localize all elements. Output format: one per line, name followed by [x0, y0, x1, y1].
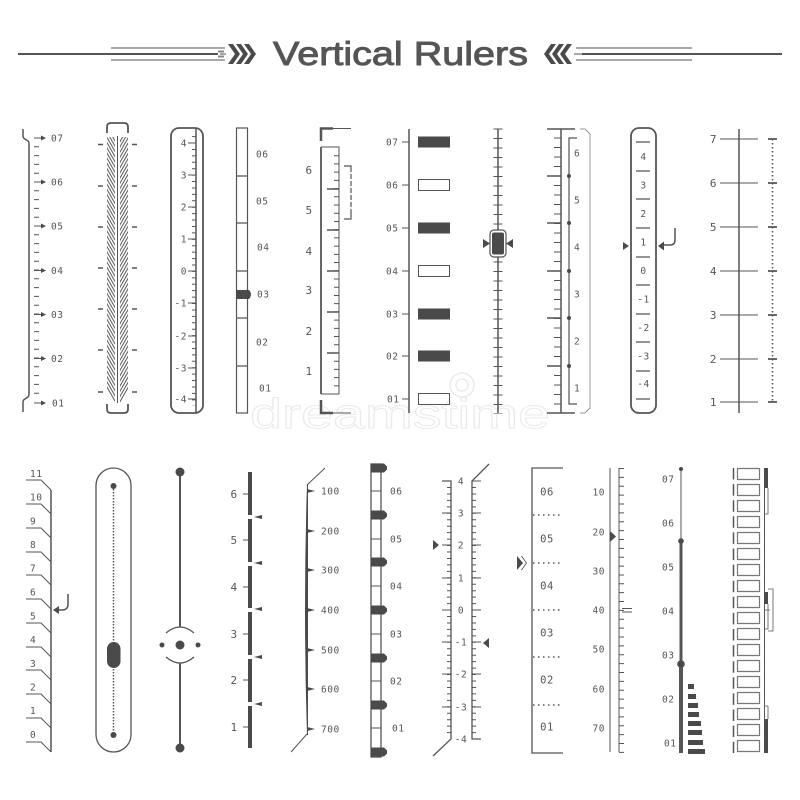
ruler 3: rounded frame scale: -1 [175, 298, 187, 309]
ruler 17: twin scales: -2 [455, 669, 467, 680]
ruler 17: twin scales: 3 [458, 508, 464, 519]
ruler 9: capsule scale with arrow: -1 [637, 294, 650, 306]
ruler 3: rounded frame scale: -2 [175, 331, 187, 342]
ruler 2: hatched chevron band [98, 123, 137, 413]
ruler 19: numbered double line: 70 [593, 723, 605, 734]
ruler 17: twin scales: 4 [458, 476, 464, 487]
ruler 1: bracket with arrows: 06 [51, 178, 63, 188]
ruler 16: column with tabs: 04 [390, 581, 402, 592]
ruler 18: bracket panel with dotted rows: 02 [540, 674, 554, 686]
ruler 5: box scale with corner brackets: 1 [305, 365, 313, 378]
ruler 1: bracket with arrows: 01 [52, 398, 64, 410]
ruler 8: double scale with dots [547, 129, 590, 413]
ruler 14: segmented bar scale: 5 [230, 534, 238, 547]
ruler 13: line slider with target [160, 468, 200, 752]
ruler 11: tabbed scale with arrow: 2 [30, 682, 36, 694]
ruler 11: tabbed scale with arrow: 3 [30, 659, 36, 670]
ruler 20: progress line with bars: 04 [662, 606, 674, 617]
ruler 21: stacked cells with side bars [734, 468, 773, 753]
ruler 8: double scale with dots: 3 [574, 290, 580, 300]
ruler 17: twin scales: 2 [458, 540, 464, 551]
ruler 6: line with blocks: 06 [386, 180, 398, 191]
ruler 8: double scale with dots: 1 [574, 384, 580, 394]
ruler 6: line with blocks: 07 [386, 137, 398, 148]
ruler 10: crossbar scale with dotted track: 4 [710, 265, 717, 278]
ruler 15: bowed line scale: 200 [321, 526, 340, 538]
ruler 1: bracket with arrows: 07 [51, 134, 63, 144]
ruler 11: tabbed scale with arrow: 10 [30, 492, 42, 504]
ruler 15: bowed line scale: 100 [321, 486, 340, 498]
ruler 17: twin scales: -1 [455, 637, 467, 648]
ruler 9: capsule scale with arrow: -3 [637, 352, 650, 362]
ruler 19: numbered double line: 20 [593, 527, 605, 538]
ruler 15: bowed line scale: 300 [321, 566, 340, 576]
ruler 10: crossbar scale with dotted track: 5 [710, 221, 717, 234]
ruler 8: double scale with dots: 4 [574, 242, 580, 254]
ruler 10: crossbar scale with dotted track: 2 [710, 353, 717, 366]
ruler 20: progress line with bars: 03 [662, 650, 674, 661]
ruler 20: progress line with bars: 02 [662, 694, 674, 705]
ruler 4: segmented column with marker: 01 [259, 383, 271, 394]
ruler 4: segmented column with marker: 03 [257, 289, 269, 300]
ruler 11: tabbed scale with arrow: 4 [30, 635, 36, 646]
ruler 10: crossbar scale with dotted track [710, 129, 777, 413]
ruler 15: bowed line scale: 400 [321, 606, 340, 616]
ruler 3: rounded frame scale: 3 [181, 170, 187, 181]
watermark: dreamstime [250, 390, 550, 437]
ruler 18: bracket panel with dotted rows: 01 [540, 722, 554, 734]
ruler 9: capsule scale with arrow: -4 [637, 379, 650, 390]
ruler 16: column with tabs: 01 [392, 723, 404, 734]
ruler 9: capsule scale with arrow: 3 [640, 180, 647, 192]
ruler 8: double scale with dots: 5 [574, 196, 580, 206]
ruler 10: crossbar scale with dotted track: 6 [710, 177, 717, 190]
ruler 3: rounded frame scale: 0 [181, 266, 187, 277]
ruler 11: tabbed scale with arrow: 9 [30, 516, 36, 528]
ruler 12: capsule slider [96, 468, 131, 752]
ruler 6: line with blocks [386, 129, 450, 413]
ruler 6: line with blocks: 01 [387, 394, 399, 405]
ruler 10: crossbar scale with dotted track: 3 [710, 309, 717, 322]
ruler 9: capsule scale with arrow: 0 [640, 266, 647, 277]
ruler 19: numbered double line: 50 [593, 644, 605, 655]
ruler 19: numbered double line: 30 [593, 566, 605, 577]
ruler 10: crossbar scale with dotted track: 1 [710, 396, 717, 409]
ruler 19: numbered double line [593, 468, 632, 753]
ruler 18: bracket panel with dotted rows [517, 468, 563, 753]
ruler 4: segmented column with marker: 02 [256, 337, 268, 348]
ruler 1: bracket with arrows [23, 129, 64, 412]
ruler 11: tabbed scale with arrow [26, 469, 68, 752]
ruler 5: box scale with corner brackets: 6 [305, 164, 313, 177]
ruler 20: progress line with bars: 05 [662, 562, 674, 573]
ruler 14: segmented bar scale: 3 [230, 628, 238, 641]
ruler 1: bracket with arrows: 05 [51, 222, 63, 232]
ruler 18: bracket panel with dotted rows: 06 [540, 486, 554, 498]
ruler 20: progress line with bars: 07 [662, 474, 674, 485]
ruler 7: tick track with knob [483, 128, 513, 414]
ruler 8: double scale with dots: 6 [574, 148, 580, 160]
ruler 4: segmented column with marker: 06 [256, 149, 268, 160]
ruler 19: numbered double line: 10 [593, 487, 605, 498]
ruler 15: bowed line scale: 500 [321, 646, 340, 656]
ruler 14: segmented bar scale: 1 [230, 721, 238, 734]
ruler 6: line with blocks: 02 [386, 351, 398, 362]
ruler 1: bracket with arrows: 04 [51, 266, 63, 277]
ruler 19: numbered double line: 40 [593, 605, 605, 616]
ruler 14: segmented bar scale [230, 472, 262, 748]
ruler 10: crossbar scale with dotted track: 7 [710, 133, 717, 146]
ruler 3: rounded frame scale: -4 [175, 394, 187, 405]
ruler 17: twin scales: -3 [455, 702, 467, 713]
ruler 3: rounded frame scale [171, 128, 203, 413]
ruler 5: box scale with corner brackets [305, 128, 351, 413]
ruler 16: column with tabs: 06 [390, 486, 402, 497]
ruler 17: twin scales: 1 [458, 573, 464, 584]
ruler 17: twin scales [433, 464, 489, 756]
ruler 14: segmented bar scale: 4 [230, 581, 238, 594]
ruler 11: tabbed scale with arrow: 5 [30, 612, 36, 622]
ruler 6: line with blocks: 03 [386, 309, 398, 320]
ruler 17: twin scales: 0 [458, 605, 464, 616]
ruler 16: column with tabs: 02 [390, 676, 402, 687]
ruler 1: bracket with arrows: 02 [51, 354, 63, 365]
ruler 18: bracket panel with dotted rows: 05 [540, 534, 554, 546]
ruler 20: progress line with bars: 01 [664, 738, 676, 749]
ruler 3: rounded frame scale: 4 [181, 138, 187, 149]
ruler 11: tabbed scale with arrow: 6 [30, 588, 36, 598]
ruler 19: numbered double line: 60 [593, 684, 605, 695]
ruler 17: twin scales: -4 [455, 734, 467, 745]
ruler 3: rounded frame scale: -3 [175, 363, 187, 374]
ruler 14: segmented bar scale: 2 [230, 674, 238, 687]
ruler 4: segmented column with marker [236, 128, 271, 413]
ruler 18: bracket panel with dotted rows: 03 [540, 628, 554, 640]
ruler 11: tabbed scale with arrow: 11 [30, 469, 42, 480]
ruler 20: progress line with bars: 06 [662, 518, 674, 529]
ruler 5: box scale with corner brackets: 4 [305, 245, 313, 258]
ruler 4: segmented column with marker: 04 [257, 242, 269, 253]
ruler 9: capsule scale with arrow: 1 [640, 238, 647, 248]
ruler 15: bowed line scale: 600 [321, 684, 340, 696]
ruler 11: tabbed scale with arrow: 0 [30, 730, 36, 741]
title [18, 35, 782, 72]
ruler 1: bracket with arrows: 03 [51, 310, 63, 321]
ruler 9: capsule scale with arrow: -2 [637, 323, 650, 334]
ruler 5: box scale with corner brackets: 5 [305, 204, 313, 217]
ruler 11: tabbed scale with arrow: 8 [30, 540, 36, 551]
ruler 18: bracket panel with dotted rows: 04 [540, 580, 554, 592]
ruler 6: line with blocks: 05 [386, 223, 398, 234]
ruler 8: double scale with dots: 2 [574, 336, 580, 348]
ruler 15: bowed line scale [291, 468, 340, 752]
ruler 16: column with tabs: 03 [390, 629, 402, 640]
ruler 3: rounded frame scale: 2 [181, 202, 187, 213]
ruler 11: tabbed scale with arrow: 7 [30, 564, 36, 574]
ruler 20: progress line with bars [662, 467, 705, 754]
ruler 9: capsule scale with arrow: 4 [640, 152, 647, 163]
ruler 16: column with tabs: 05 [390, 534, 402, 545]
ruler 3: rounded frame scale: 1 [181, 234, 187, 245]
ruler 5: box scale with corner brackets: 2 [305, 325, 313, 338]
ruler 11: tabbed scale with arrow: 1 [30, 706, 36, 717]
ruler 16: column with tabs [371, 464, 404, 757]
ruler 15: bowed line scale: 700 [321, 724, 340, 736]
ruler 9: capsule scale with arrow [623, 128, 675, 413]
title: Vertical Rulers [273, 35, 528, 72]
ruler 14: segmented bar scale: 6 [230, 488, 238, 501]
ruler 9: capsule scale with arrow: 2 [640, 209, 647, 220]
ruler 4: segmented column with marker: 05 [256, 196, 268, 207]
ruler 5: box scale with corner brackets: 3 [305, 284, 313, 297]
watermark [250, 373, 550, 437]
ruler 6: line with blocks: 04 [386, 266, 398, 277]
